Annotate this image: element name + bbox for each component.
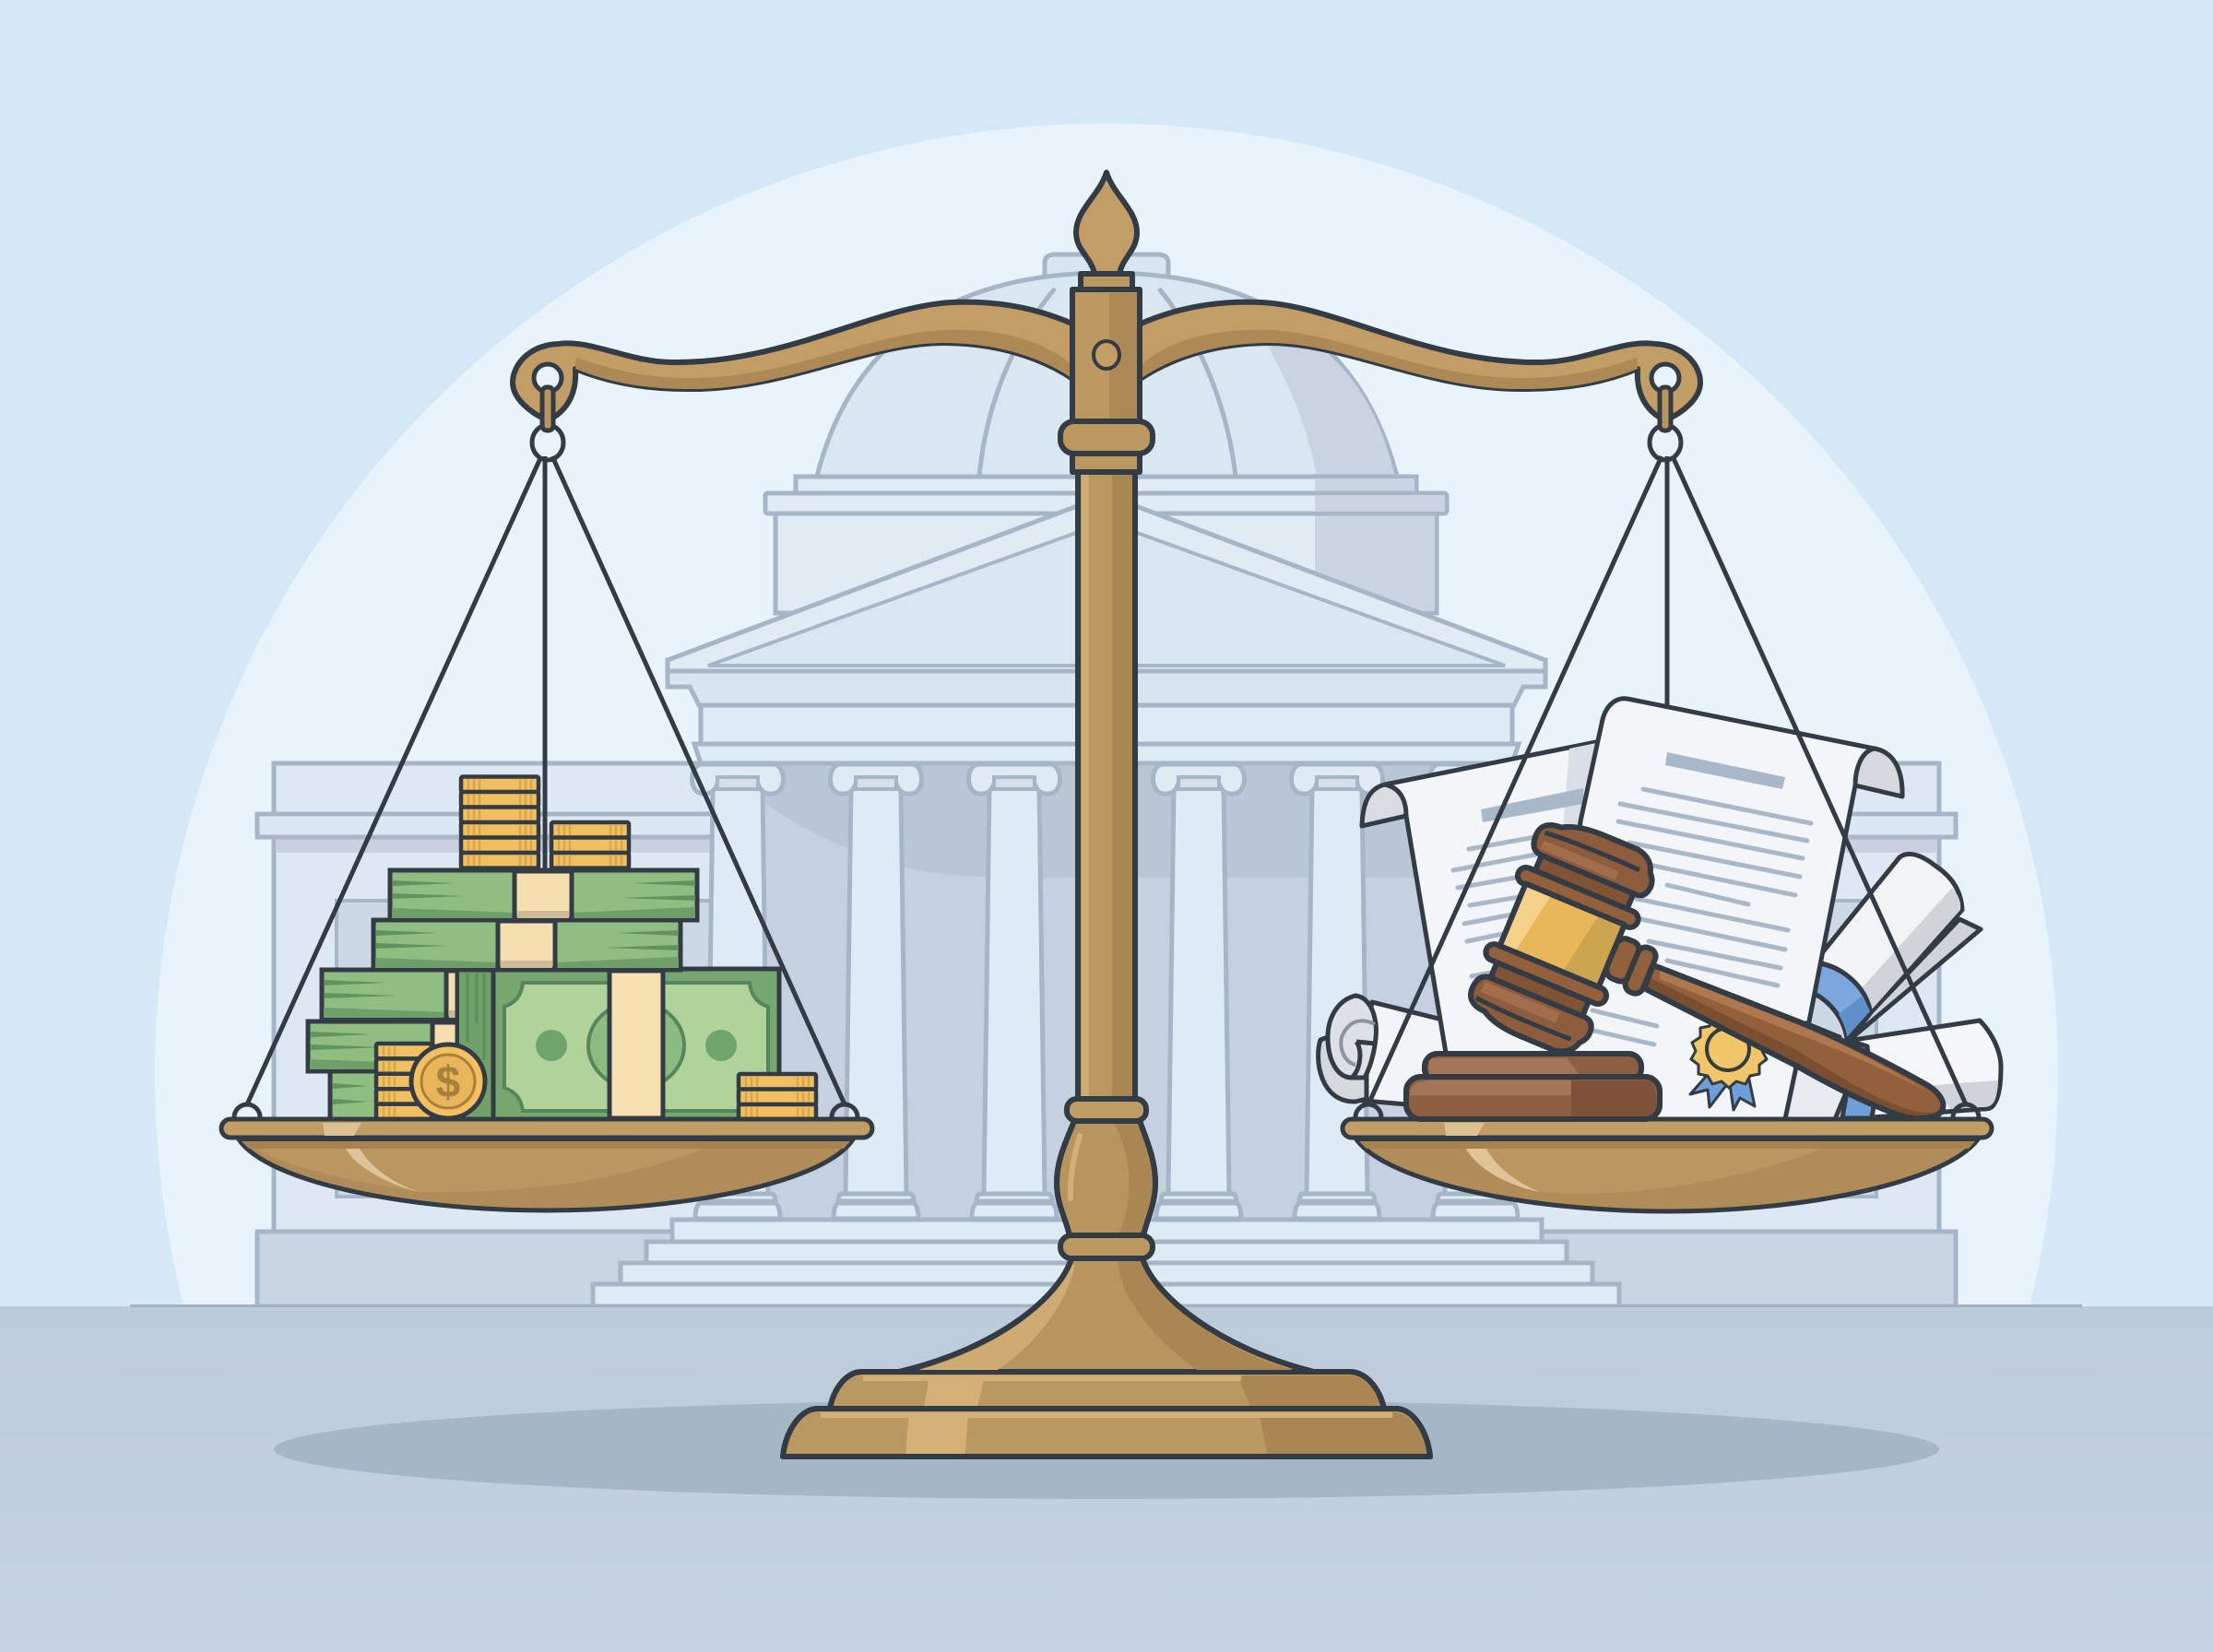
documents: [1319, 699, 2001, 1119]
back document: [1362, 742, 1604, 1097]
finial collar: [1081, 274, 1132, 290]
gavel handle ring: [1623, 945, 1658, 996]
right pan: [1343, 1104, 1992, 1211]
frieze: [701, 703, 1512, 744]
post knob: [1060, 421, 1153, 454]
left pan hooks: [234, 1104, 858, 1121]
small scroll left: [1319, 996, 1452, 1108]
right side ropes: [1368, 456, 1966, 1104]
entrance steps: [593, 1220, 1619, 1306]
base lower tier: [783, 1409, 1430, 1457]
gavel bottom cap: [1462, 973, 1594, 1060]
bundle 1: [390, 870, 697, 920]
left pan rim: [221, 1119, 872, 1138]
gavel head: [1461, 810, 1691, 1073]
gavel handle: [1644, 965, 1943, 1118]
right pan bowl: [1356, 1139, 1978, 1211]
short coin stack: [551, 822, 629, 868]
floor: [0, 1306, 2213, 1652]
left wing: [257, 763, 742, 1233]
lower bundle: [330, 1069, 385, 1119]
bundle 4: [308, 1021, 615, 1071]
right beam arm: [1139, 302, 1700, 420]
shaft: [1078, 470, 1135, 1101]
dome: [817, 254, 1397, 477]
left rope centre: [542, 456, 548, 885]
right rope centre: [1665, 456, 1669, 719]
background halo circle: [155, 124, 2058, 1306]
right wing: [1471, 763, 1956, 1233]
left beam arm: [513, 302, 1074, 420]
columns: [692, 764, 1521, 1219]
floor shadow: [274, 1399, 1939, 1499]
portico back wall: [738, 745, 1475, 1221]
lower bulb: [1057, 1121, 1155, 1235]
gavel collars: [1515, 865, 1640, 930]
pivot post: [1072, 289, 1140, 422]
dollar coin: $: [436, 1058, 461, 1107]
entablature: [668, 660, 1545, 705]
gold band: [1500, 884, 1625, 987]
lower collar: [1060, 1235, 1153, 1258]
large banknote bundle: [457, 969, 779, 1119]
balance scale stand: [783, 470, 1430, 1457]
sound block: [1406, 1054, 1660, 1119]
bundle 3: [322, 970, 629, 1020]
pediment: [668, 495, 1545, 671]
post neck: [1072, 454, 1140, 472]
left side ropes: [247, 456, 845, 1104]
upper collar: [1067, 1099, 1146, 1121]
tall coin stack: [461, 776, 538, 868]
low coin stack: [739, 1074, 816, 1120]
building plinth: [257, 1232, 1956, 1306]
rolled document right: [1815, 854, 1981, 1039]
gavel necks: [1533, 853, 1635, 913]
seal with ribbons: [1690, 1014, 1767, 1110]
right pan highlight: [1466, 1147, 1826, 1194]
flared foot: [899, 1258, 1314, 1372]
left hanger: [532, 364, 563, 460]
rolled document lower right: [1842, 1021, 2001, 1118]
right pan hooks: [1355, 1104, 1979, 1121]
stack of money: [308, 776, 816, 1120]
architrave: [694, 744, 1519, 763]
base upper tier: [830, 1372, 1384, 1409]
drum: [765, 477, 1447, 613]
left pan: [221, 1104, 872, 1210]
gavel: [1406, 810, 1943, 1119]
main document: [1549, 699, 1902, 1119]
bundle 2: [373, 920, 680, 970]
left pan bowl: [239, 1139, 853, 1210]
lower white sheet: [1785, 1023, 1847, 1119]
floor horizon line: [130, 1304, 2082, 1307]
gavel top cap: [1530, 811, 1662, 899]
right pan rim: [1343, 1119, 1992, 1138]
gavel handle knob: [1604, 936, 1642, 985]
coin stack beside gold coin: [376, 1044, 432, 1119]
dollar coin: [411, 1044, 485, 1118]
left pan highlight: [254, 1147, 710, 1192]
courthouse building: [257, 254, 1956, 1306]
finial: [1076, 172, 1137, 274]
right hanger: [1650, 364, 1681, 460]
balance beam: [513, 172, 1700, 472]
